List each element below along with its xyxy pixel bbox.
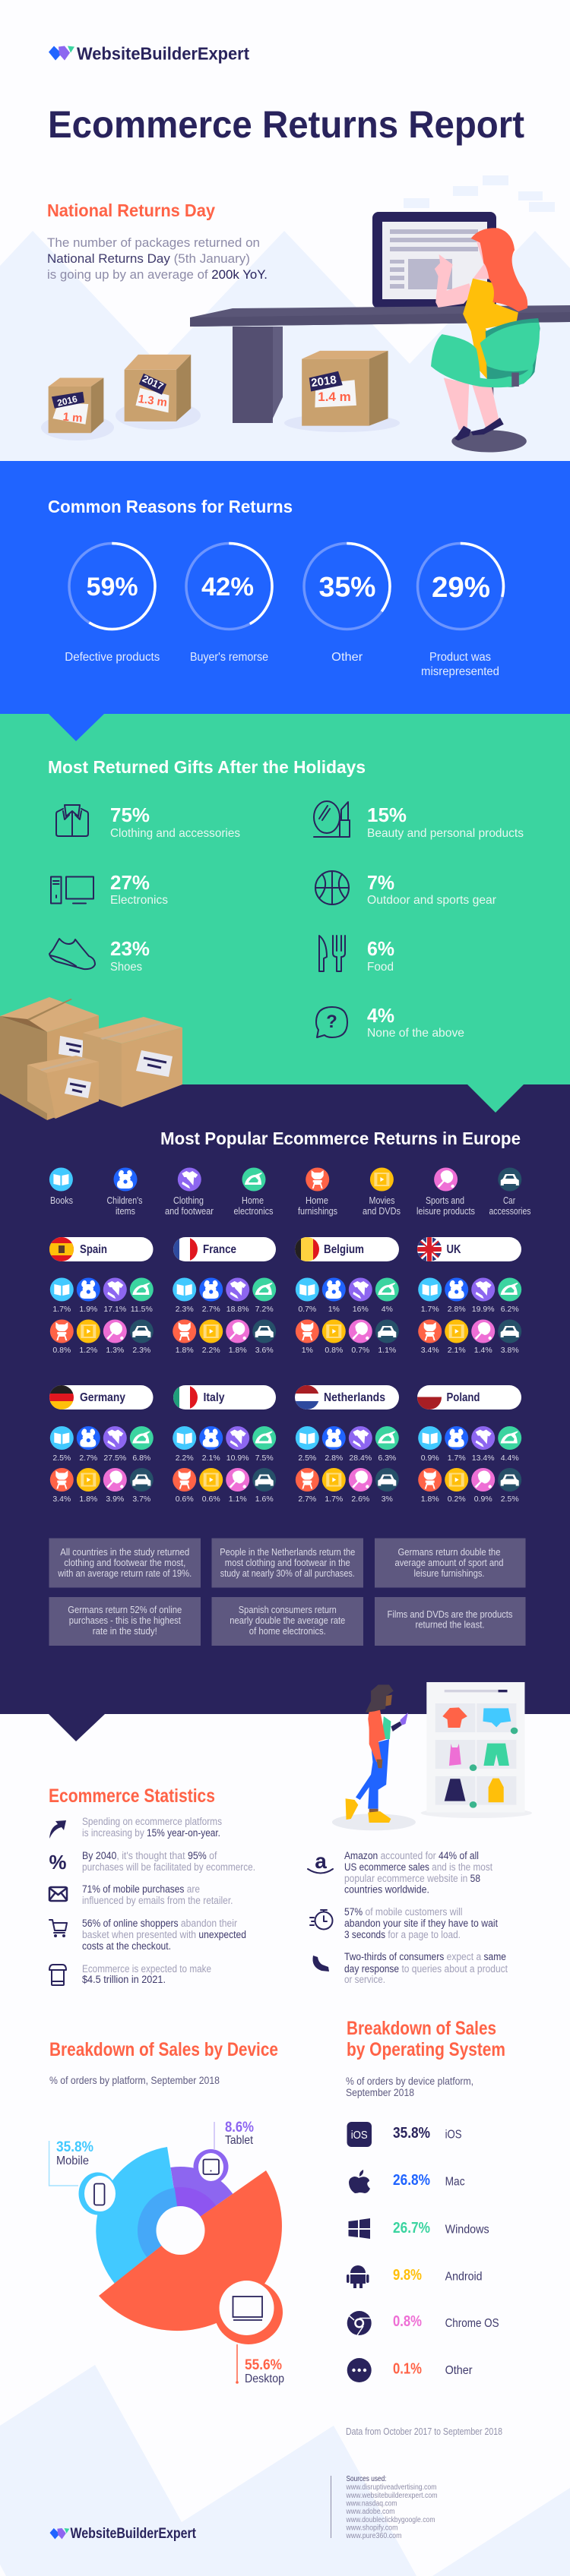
stat: 4%: 4% xyxy=(367,1004,394,1027)
callout: mobile xyxy=(49,2139,117,2215)
sources: www.doubleclickbygoogle.com xyxy=(346,2516,435,2524)
stat: 15%: 15% xyxy=(367,803,407,826)
green pointer xyxy=(467,1084,524,1113)
stat: 4%: None of the above xyxy=(367,1027,464,1040)
country: France: 2.2% xyxy=(202,1346,220,1355)
country: Italy: 2.1% xyxy=(202,1454,220,1463)
stat: 4% xyxy=(367,1004,464,1040)
OS row: Chrome OS: Chrome OS xyxy=(445,2317,499,2330)
country: Belgium: 1% xyxy=(302,1346,313,1355)
legend labels: Clothing xyxy=(173,1195,204,1206)
callout: Germans sport xyxy=(375,1539,526,1587)
legend labels: Children's xyxy=(106,1195,143,1206)
icon: question bubble: ? xyxy=(326,1012,337,1032)
pie chart: device breakdown xyxy=(96,2147,282,2331)
stat: 23% xyxy=(110,937,150,974)
country: Germany: 1.8% xyxy=(79,1495,97,1504)
stat: Amazon xyxy=(344,1850,492,1896)
stat: 27% xyxy=(110,871,168,907)
icon: envelope xyxy=(49,1887,67,1901)
country: France: France xyxy=(203,1243,236,1256)
icon: rising arrow xyxy=(49,1820,66,1839)
country: Spain: 17.1% xyxy=(103,1305,126,1314)
callout: Germans 52%: purchases - this is the highest xyxy=(69,1615,181,1626)
stat: 15%: Beauty and personal products xyxy=(367,827,524,840)
section background: statistics xyxy=(0,1714,570,2576)
stat: Amazon: Amazon accounted for 44% of all xyxy=(344,1850,479,1861)
section background: hero xyxy=(0,0,570,461)
OS row: iOS: iOS xyxy=(351,2129,368,2142)
callout: Germans sport: Germans return double the xyxy=(398,1546,500,1558)
stat: same day response xyxy=(344,1951,508,1985)
legend labels: Movies xyxy=(369,1195,395,1206)
stat: 7%: 7% xyxy=(367,871,394,894)
desk xyxy=(190,305,570,423)
OS row: Other: Other xyxy=(445,2364,473,2377)
country: Germany: 27.5% xyxy=(103,1454,126,1463)
callout: clothing most returned: clothing and footwear the most, xyxy=(64,1557,185,1568)
icon: cutlery xyxy=(319,936,345,971)
country: Italy: 0.6% xyxy=(202,1495,220,1504)
sources: www.adobe.com xyxy=(346,2508,395,2516)
box 2016: 1 m xyxy=(62,410,83,425)
decorative clouds xyxy=(404,175,555,212)
intro text: is going up by an average of 200k YoY. xyxy=(47,267,268,282)
country: Belgium xyxy=(295,1237,399,1355)
callout: Spanish consumers: nearly double the average rate xyxy=(230,1615,345,1626)
stat: same day response: or service. xyxy=(344,1974,385,1985)
icon: telephone xyxy=(312,1956,329,1971)
stat: mobile purchases: 71% of mobile purchases are xyxy=(82,1883,200,1895)
country: Poland: 0.2% xyxy=(448,1495,466,1504)
stat: same day response: Two-thirds of consumers expect a same xyxy=(344,1951,506,1962)
country: Germany: 2.5% xyxy=(52,1454,71,1463)
country: Spain: 11.5% xyxy=(131,1305,153,1314)
country: Spain: Spain xyxy=(80,1243,107,1256)
callout: Spanish consumers: Spanish consumers return xyxy=(239,1604,337,1615)
ring labels: Product was xyxy=(429,651,491,664)
stat: mobile customers: abandon your site if they have to wait xyxy=(344,1918,498,1929)
intro text xyxy=(47,235,268,282)
OS row: Windows xyxy=(348,2218,489,2239)
country: UK xyxy=(417,1237,521,1355)
country: Spain xyxy=(49,1237,154,1355)
country: UK: UK xyxy=(447,1243,461,1256)
OS row: iOS: 35.8% xyxy=(393,2125,430,2142)
callout: tablet: 8.6% xyxy=(225,2120,254,2136)
callout: clothing most returned xyxy=(49,1539,201,1587)
country: Spain: 1.7% xyxy=(52,1305,71,1314)
intro text: National Returns Day (5th January) xyxy=(47,251,250,266)
OS row: Windows: Windows xyxy=(445,2224,489,2236)
legend labels: leisure products xyxy=(416,1205,475,1217)
ring values: 59% xyxy=(87,573,138,601)
country: Poland xyxy=(417,1385,521,1504)
callout: mobile: 35.8% xyxy=(56,2139,93,2155)
country: France: 18.8% xyxy=(226,1305,249,1314)
stat: 27%: Electronics xyxy=(110,894,168,907)
OS row: Chrome OS: 0.8% xyxy=(393,2313,422,2330)
country: France: 7.2% xyxy=(255,1305,274,1314)
icon: phone shop xyxy=(49,1965,66,1985)
country: Italy: 1.1% xyxy=(229,1495,247,1504)
country: Poland: 1.7% xyxy=(448,1454,466,1463)
callout: films and DVDs: Films and DVDs are the products xyxy=(388,1608,513,1620)
country: Belgium: Belgium xyxy=(324,1243,364,1256)
country: Poland: 13.4% xyxy=(472,1454,495,1463)
stat: mobile purchases: influenced by emails from the retailer. xyxy=(82,1895,233,1906)
blue pointer xyxy=(49,714,104,741)
OS row: Chrome OS xyxy=(347,2311,499,2335)
callout: Netherlands: most clothing and footwear in the xyxy=(225,1557,350,1568)
country: Netherlands xyxy=(295,1385,399,1504)
ring values: 35% xyxy=(319,571,375,603)
stat: spending: is increasing by 15% year-on-year. xyxy=(82,1827,220,1839)
callout: tablet: Tablet xyxy=(225,2134,253,2147)
footer logo: WebsiteBuilderExpert xyxy=(70,2526,197,2542)
stat: 6%: Food xyxy=(367,961,394,974)
country: Poland: 4.4% xyxy=(501,1454,519,1463)
box 2017 xyxy=(116,355,201,430)
stat: mobile customers: 3 seconds for a page to load. xyxy=(344,1929,461,1940)
country: Germany: 2.7% xyxy=(79,1454,97,1463)
heading: sales by operating system: by Operating System xyxy=(347,2039,505,2060)
callout: Germans 52%: Germans return 52% of online xyxy=(68,1604,182,1615)
OS row: iOS xyxy=(347,2122,462,2147)
icon: question bubble xyxy=(316,1007,347,1037)
sources xyxy=(331,2475,438,2540)
country: UK: 3.8% xyxy=(501,1346,519,1355)
stat: 7% xyxy=(367,871,497,907)
icon: Amazon: a xyxy=(315,1849,327,1873)
country: France: 2.7% xyxy=(202,1305,220,1314)
country: Germany: Germany xyxy=(80,1391,125,1404)
legend labels: and DVDs xyxy=(363,1205,401,1217)
stat: trillion: Ecommerce is expected to make xyxy=(82,1963,211,1975)
ring labels: Other xyxy=(331,651,363,664)
callout: films and DVDs: returned the least. xyxy=(415,1619,485,1630)
sources: www.websitebuilderexpert.com xyxy=(346,2492,438,2500)
stat: basket abandon: costs at the checkout. xyxy=(82,1940,171,1952)
callout: clothing most returned: All countries in the study returned xyxy=(60,1546,189,1558)
callout: mobile: Mobile xyxy=(56,2155,89,2167)
legend labels: furnishings xyxy=(298,1205,337,1217)
legend labels: Home xyxy=(242,1195,264,1206)
country: Belgium: 0.7% xyxy=(351,1346,369,1355)
sources: www.disruptiveadvertising.com xyxy=(346,2483,436,2492)
icon: mirror and lipstick xyxy=(314,801,350,837)
callout: Germans sport: leisure furnishings. xyxy=(413,1567,485,1579)
OS row: iOS: iOS xyxy=(445,2128,462,2142)
country: France: 1.8% xyxy=(176,1346,194,1355)
stat: 7%: Outdoor and sports gear xyxy=(367,894,497,907)
country: Belgium: 4% xyxy=(382,1305,393,1314)
ring labels: misrepresented xyxy=(421,665,499,678)
country: Netherlands: 1.7% xyxy=(325,1495,343,1504)
country: Italy: 10.9% xyxy=(226,1454,249,1463)
callout: desktop: 55.6% xyxy=(245,2357,282,2373)
OS row: Windows: 26.7% xyxy=(393,2220,430,2237)
country: France: 1.8% xyxy=(229,1346,247,1355)
box 2016 xyxy=(41,378,114,440)
icon: stopwatch xyxy=(310,1910,333,1929)
legend labels: and footwear xyxy=(165,1205,214,1217)
callout: desktop: Desktop xyxy=(245,2372,284,2385)
country: Poland: 1.8% xyxy=(421,1495,439,1504)
stat: 75%: 75% xyxy=(110,803,150,826)
stat: spending: Spending on ecommerce platforms xyxy=(82,1816,222,1827)
callout: Netherlands: People in the Netherlands return the xyxy=(220,1546,355,1558)
stat: 6% xyxy=(367,937,394,974)
OS row: Mac: 26.8% xyxy=(393,2172,430,2189)
country: Italy xyxy=(173,1385,276,1504)
stat: 15% xyxy=(367,803,524,840)
panel: common reasons for returns xyxy=(0,461,570,714)
legend labels: Car xyxy=(503,1195,516,1206)
country: Germany: 6.8% xyxy=(132,1454,150,1463)
box 2018: 2018 xyxy=(310,374,337,390)
country: UK: 1.4% xyxy=(474,1346,492,1355)
country: Germany: 3.7% xyxy=(132,1495,150,1504)
box 2017: 1.3 m xyxy=(138,393,168,409)
stat: basket abandon: 56% of online shoppers abandon their xyxy=(82,1918,237,1929)
country: UK: 1.7% xyxy=(421,1305,439,1314)
intro text: The number of packages returned on xyxy=(47,235,260,250)
stat: Amazon: popular ecommerce website in 58 xyxy=(344,1873,480,1884)
illustration: shop screen xyxy=(421,1682,532,1818)
country: Poland: Poland xyxy=(447,1391,480,1404)
icon: percent: % xyxy=(49,1851,67,1874)
heading: Most Popular Ecommerce Returns in Europe xyxy=(160,1129,521,1148)
illustration: woman on chair xyxy=(431,228,540,452)
callout: Spanish consumers xyxy=(211,1597,363,1646)
stat: trillion xyxy=(82,1963,211,1985)
stat: 75%: Clothing and accessories xyxy=(110,827,240,840)
stat: 75% xyxy=(110,803,240,840)
callout: Netherlands xyxy=(211,1539,363,1587)
country: Netherlands: 6.3% xyxy=(378,1454,396,1463)
OS row: Other: 0.1% xyxy=(393,2360,422,2377)
stat: 6%: 6% xyxy=(367,937,394,960)
panel: most returned gifts xyxy=(0,714,570,1084)
hero mountains xyxy=(0,231,570,461)
monitor xyxy=(372,212,496,308)
country: Netherlands: 28.4% xyxy=(349,1454,372,1463)
legend icons xyxy=(49,1168,521,1191)
subheading: OS xyxy=(346,2075,473,2098)
callout: clothing most returned: with an average return rate of 19%. xyxy=(57,1567,192,1579)
country: Italy: Italy xyxy=(204,1391,225,1404)
callout: Germans sport: average amount of sport and xyxy=(395,1557,503,1568)
illustration: person with phone xyxy=(332,1684,416,1830)
ring labels: Defective products xyxy=(65,651,160,664)
callout: Germans 52%: rate in the study! xyxy=(93,1625,157,1637)
box 2018: 1.4 m xyxy=(318,390,351,404)
subheading: OS: September 2018 xyxy=(346,2086,414,2098)
ring values: 42% xyxy=(201,573,254,601)
ring 59% xyxy=(69,544,503,629)
callout: tablet xyxy=(193,2120,254,2184)
heading: National Returns Day: National Returns Day xyxy=(47,200,215,220)
stat: same day response: day response to queries about a product xyxy=(344,1963,508,1975)
country: Netherlands: 2.7% xyxy=(298,1495,316,1504)
country: Belgium: 1.1% xyxy=(378,1346,396,1355)
country: Germany xyxy=(49,1385,154,1504)
ring values: 29% xyxy=(432,572,490,604)
ring labels xyxy=(65,651,499,678)
heading: sales by device: Breakdown of Sales by Device xyxy=(49,2039,278,2060)
country: Italy: 0.6% xyxy=(176,1495,194,1504)
stat: mobile purchases xyxy=(82,1883,233,1906)
country: Belgium: 0.7% xyxy=(298,1305,316,1314)
callout: films and DVDs xyxy=(375,1597,526,1646)
heading: ecommerce statistics: Ecommerce Statistics xyxy=(49,1785,215,1807)
country: Belgium: 16% xyxy=(353,1305,369,1314)
country: Poland: 0.9% xyxy=(421,1454,439,1463)
country: Italy: 1.6% xyxy=(255,1495,274,1504)
illustration: stack of boxes xyxy=(0,997,182,1120)
country: UK: 6.2% xyxy=(501,1305,519,1314)
callout: desktop xyxy=(214,2280,284,2385)
country: Spain: 1.2% xyxy=(79,1346,97,1355)
navy pointer xyxy=(49,1714,105,1741)
panel: ecommerce returns in Europe xyxy=(0,1084,570,1714)
OS row: Android: Android xyxy=(445,2271,483,2283)
icon: shoe xyxy=(49,939,95,969)
icon: shirt xyxy=(56,805,88,836)
OS row: Other xyxy=(347,2358,473,2382)
ring labels: Buyer's remorse xyxy=(190,651,268,664)
icon: cart xyxy=(49,1920,67,1937)
legend labels xyxy=(50,1195,531,1217)
country: France: 3.6% xyxy=(255,1346,274,1355)
footer mountains xyxy=(0,2365,570,2576)
country: Poland: 0.9% xyxy=(474,1495,492,1504)
legend labels: Sports and xyxy=(426,1195,464,1206)
legend labels: Home xyxy=(306,1195,328,1206)
callout: Netherlands: study at nearly 30% of all purchases. xyxy=(220,1567,355,1579)
country: Germany: 3.9% xyxy=(106,1495,124,1504)
box 2018 xyxy=(284,351,400,432)
stat: Amazon: countries worldwide. xyxy=(344,1883,429,1896)
stat: basket abandon: basket when presented with unexpected xyxy=(82,1929,246,1940)
OS row: Mac: Mac xyxy=(445,2175,465,2189)
heading: Common Reasons for Returns xyxy=(48,497,293,516)
country: UK: 3.4% xyxy=(421,1346,439,1355)
country: Spain: 1.9% xyxy=(79,1305,97,1314)
country: Netherlands: 2.5% xyxy=(298,1454,316,1463)
country: Netherlands: Netherlands xyxy=(324,1391,385,1404)
heading: sales by operating system: Breakdown of Sales xyxy=(347,2018,496,2039)
sources: www.pure360.com xyxy=(346,2532,401,2540)
stat: 2040 xyxy=(82,1850,255,1873)
stat: basket abandon xyxy=(82,1918,246,1952)
stat: 23%: 23% xyxy=(110,937,150,960)
title: Ecommerce Returns Report xyxy=(48,103,524,146)
box 2016: 2016 xyxy=(56,393,78,409)
stat: spending xyxy=(82,1816,222,1839)
country: Spain: 0.8% xyxy=(52,1346,71,1355)
country: UK: 2.1% xyxy=(448,1346,466,1355)
callout: Germans 52% xyxy=(49,1597,201,1646)
OS row: Android xyxy=(347,2265,483,2288)
footnote: Data from October 2017 to September 2018 xyxy=(346,2426,502,2437)
country: Poland: 2.5% xyxy=(501,1495,519,1504)
icon: basketball xyxy=(315,871,349,904)
sources: www.shopify.com xyxy=(346,2524,398,2532)
country: Italy: 2.2% xyxy=(176,1454,194,1463)
OS row: Android: 9.8% xyxy=(393,2267,422,2284)
country: Italy: 7.5% xyxy=(255,1454,274,1463)
country: Belgium: 0.8% xyxy=(325,1346,343,1355)
country: UK: 2.8% xyxy=(448,1305,466,1314)
subheading: OS: % of orders by device platform, xyxy=(346,2075,473,2087)
stat: mobile customers xyxy=(344,1906,498,1940)
country: Germany: 3.4% xyxy=(52,1495,71,1504)
heading: Most Returned Gifts After the Holidays xyxy=(48,757,366,777)
stat: Amazon: US ecommerce sales and is the most xyxy=(344,1861,492,1873)
legend labels: accessories xyxy=(489,1205,531,1217)
callout: Spanish consumers: of home electronics. xyxy=(249,1625,326,1637)
heading: sales by operating system xyxy=(347,2018,505,2060)
country: France xyxy=(173,1237,276,1355)
logo: WebsiteBuilderExpert xyxy=(77,44,249,64)
icon: computer xyxy=(51,876,93,904)
stat: 2040: purchases will be facilitated by ecommerce. xyxy=(82,1861,255,1873)
stat: 27%: 27% xyxy=(110,871,150,894)
OS row: Mac xyxy=(349,2170,465,2193)
icon: Amazon xyxy=(308,1849,333,1873)
stat: 23%: Shoes xyxy=(110,961,142,974)
country: Belgium: 1% xyxy=(328,1305,340,1314)
country: France: 2.3% xyxy=(176,1305,194,1314)
legend labels: Books xyxy=(50,1195,73,1206)
ring values xyxy=(87,571,490,604)
country: Netherlands: 2.8% xyxy=(325,1454,343,1463)
stat: mobile customers: 57% of mobile customers will xyxy=(344,1906,462,1918)
country: UK: 19.9% xyxy=(472,1305,495,1314)
country: Netherlands: 3% xyxy=(382,1495,393,1504)
country: Spain: 2.3% xyxy=(132,1346,150,1355)
stat: trillion: $4.5 trillion in 2021. xyxy=(82,1974,166,1985)
stat: 2040: By 2040, it's thought that 95% of xyxy=(82,1850,217,1861)
country: Spain: 1.3% xyxy=(106,1346,124,1355)
box 2017: 2017 xyxy=(141,373,165,392)
country: Netherlands: 2.6% xyxy=(351,1495,369,1504)
subheading: device: % of orders by platform, September 2018 xyxy=(49,2074,220,2086)
sources: www.nasdaq.com xyxy=(346,2500,397,2508)
legend labels: items xyxy=(116,1205,135,1217)
sources: Sources used: xyxy=(347,2475,386,2483)
legend labels: electronics xyxy=(234,1205,274,1217)
